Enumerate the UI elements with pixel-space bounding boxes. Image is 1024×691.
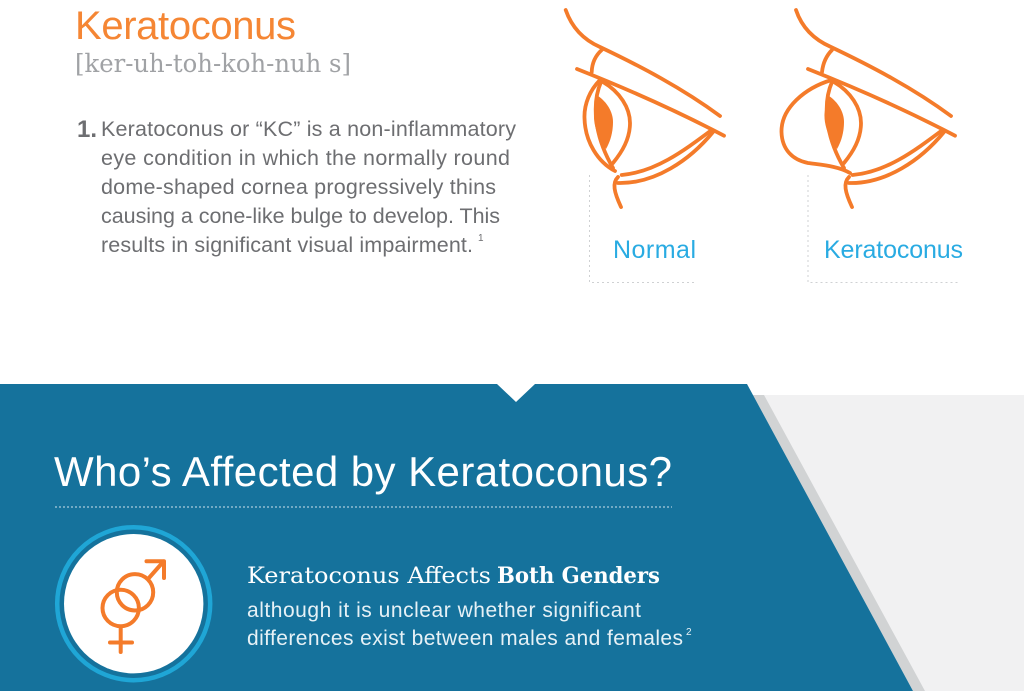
dotted frame: keratoconus	[808, 175, 960, 282]
text block: definition: results in significant visual impairment.	[101, 233, 473, 257]
subheading: both genders: Keratoconus Affects	[247, 563, 491, 589]
subheading: both genders: Both Genders	[497, 563, 660, 589]
panel: light grey background	[754, 395, 1024, 691]
text block: definition: eye condition in which the normally round	[101, 146, 510, 170]
section heading: Who’s Affected by Keratoconus?	[54, 448, 672, 495]
label: normal: Normal	[613, 236, 696, 264]
text block: definition: dome-shaped cornea progressively thins	[101, 175, 496, 199]
text block: gender differences	[247, 599, 692, 650]
text block: gender differences: although it is unclear whether significant	[247, 599, 641, 622]
list number: 1.	[77, 116, 97, 143]
subheading: both genders	[247, 563, 660, 589]
pronunciation: [ker-uh-toh-koh-nuh s]	[75, 49, 351, 78]
grey diagonal shadow strip	[752, 395, 925, 691]
heading underline	[55, 506, 672, 508]
text block: gender differences: 2	[686, 627, 692, 638]
label: keratoconus: Keratoconus	[824, 236, 963, 264]
text block: definition: causing a cone-like bulge to develop. This	[101, 204, 500, 228]
text block: definition: 1	[478, 233, 484, 244]
dotted frame: normal	[590, 175, 695, 282]
panel: blue section	[0, 384, 913, 691]
text block: definition	[101, 117, 516, 257]
icon: keratoconus eye	[781, 10, 955, 207]
icon: gender symbols in circle	[57, 527, 210, 680]
icon: normal eye	[566, 10, 724, 207]
text block: definition: Keratoconus or “KC” is a non-inflammatory	[101, 117, 516, 141]
text block: gender differences: differences exist between males and females	[247, 627, 683, 650]
title: Keratoconus	[75, 4, 296, 48]
